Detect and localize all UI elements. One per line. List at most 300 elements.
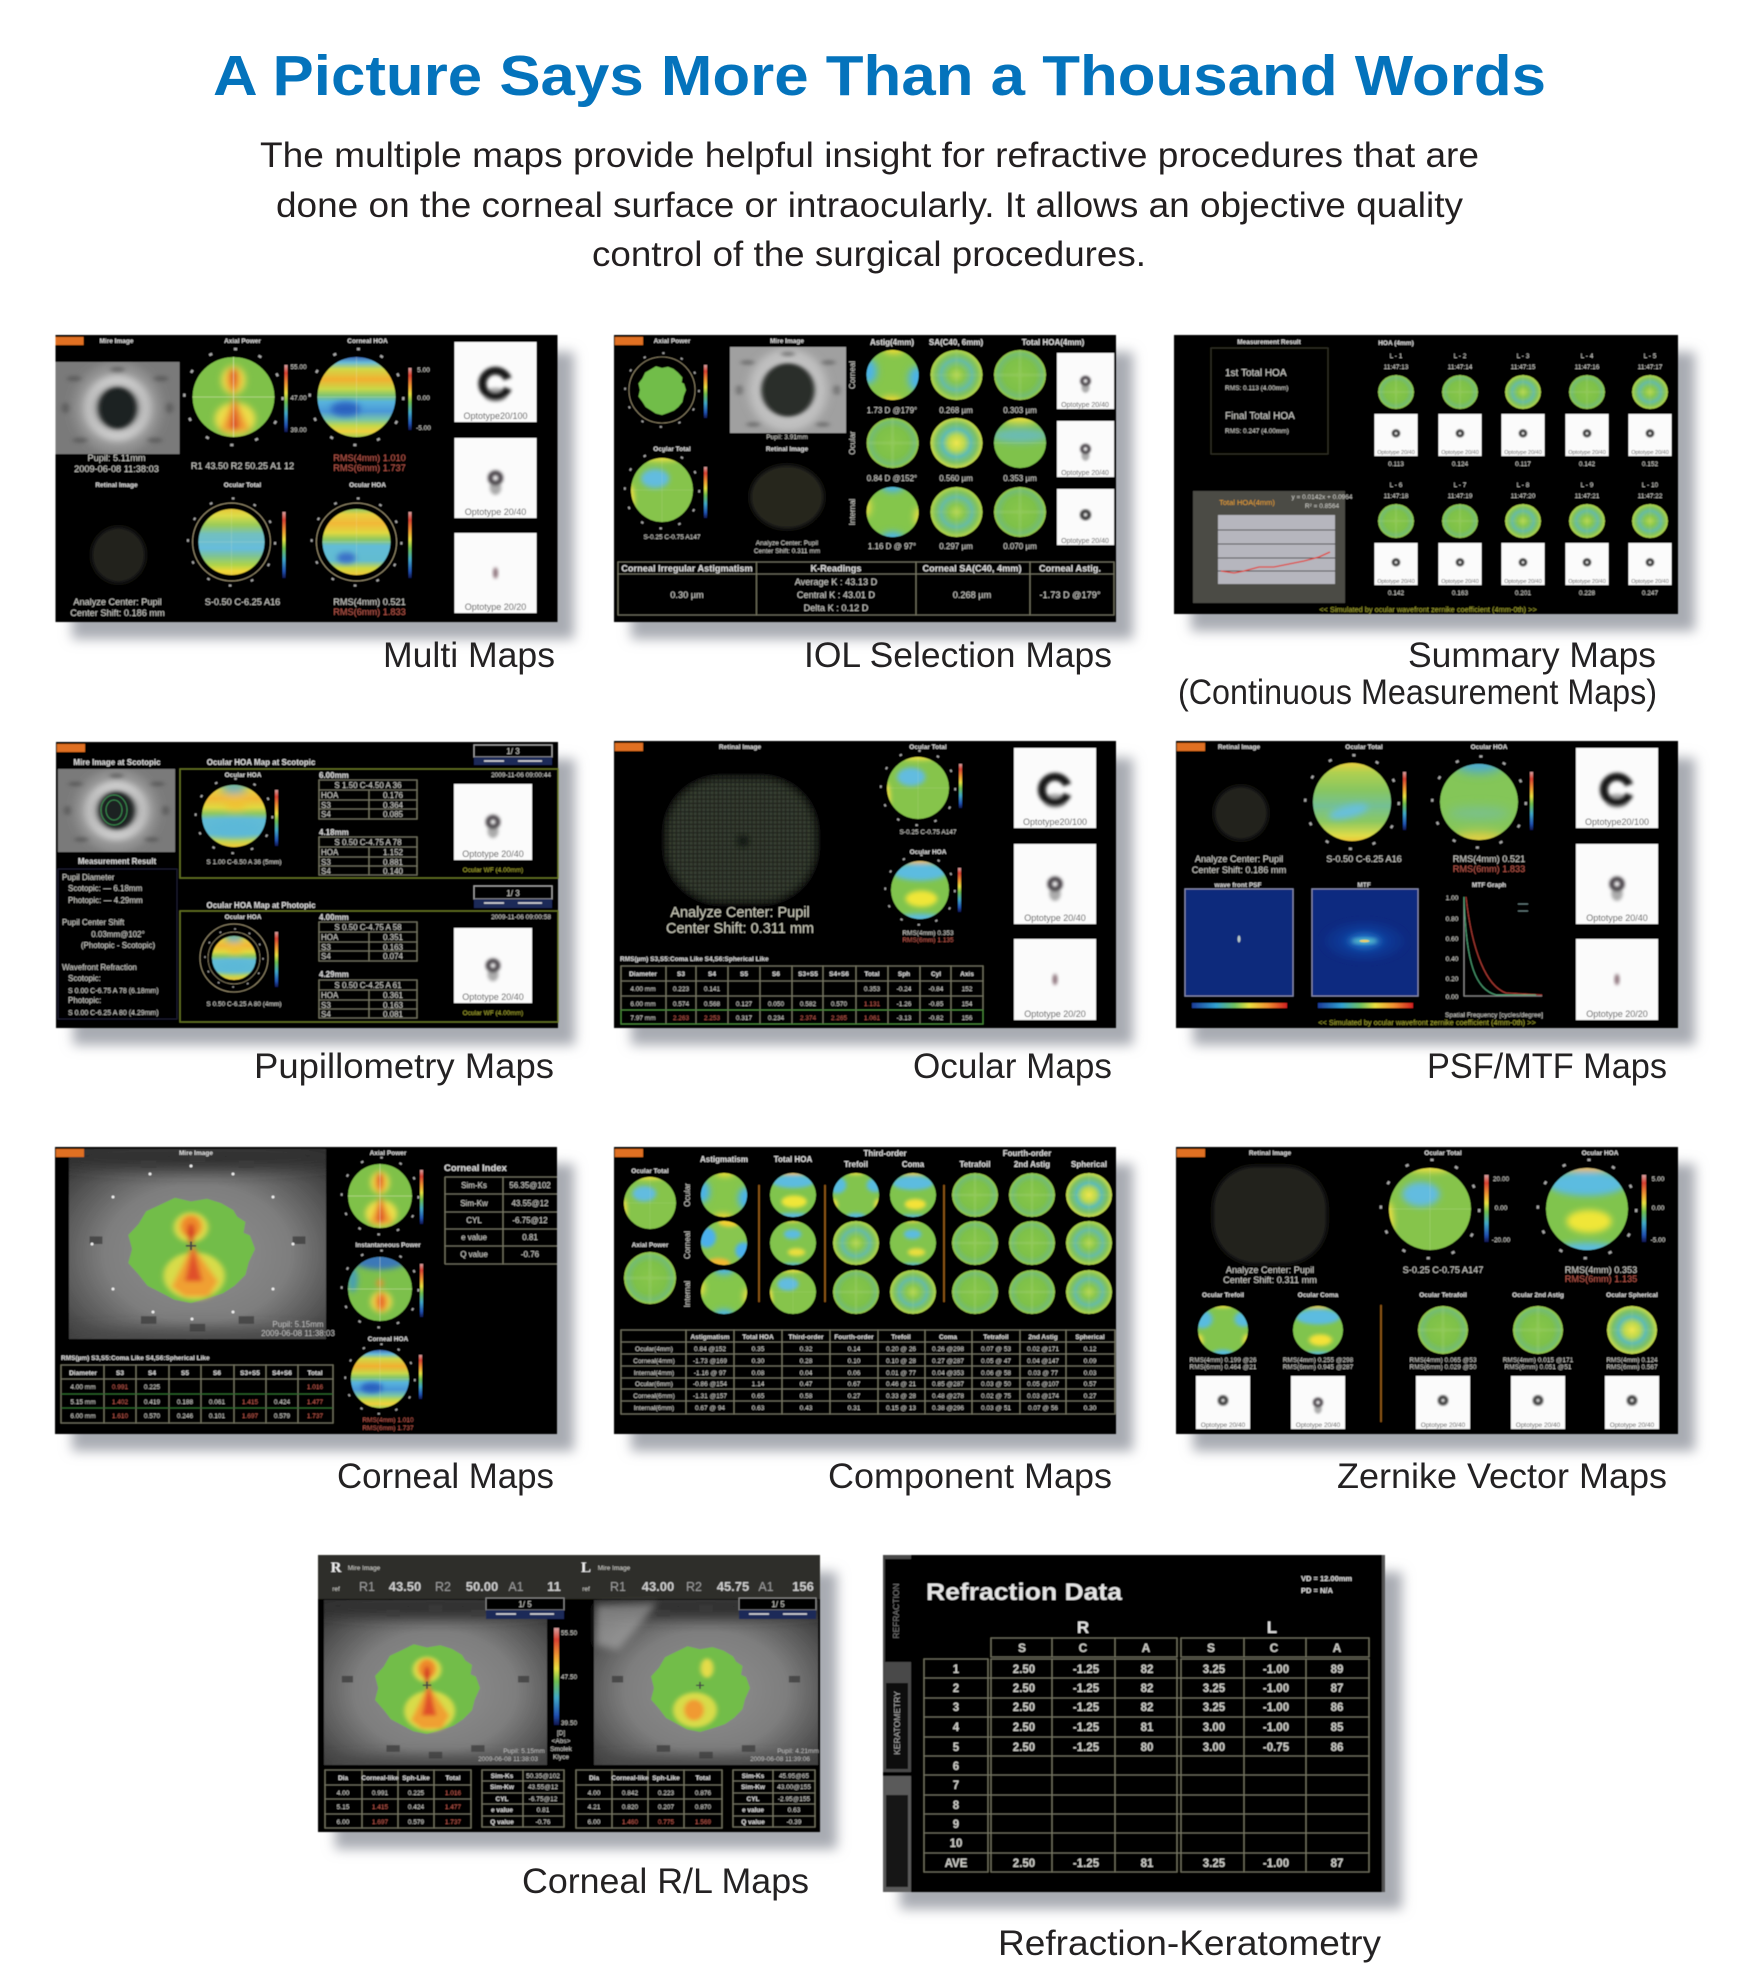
table: RMS values: 0.419: [144, 1399, 161, 1406]
table: refraction readings: 82: [1141, 1683, 1153, 1695]
table: corneal index: Sim-Kw: [460, 1199, 488, 1208]
screenshot: Zernike Vector Maps: [1176, 1147, 1678, 1434]
table: RMS values: 156: [962, 1015, 973, 1022]
screenshot: Summary Maps: 0.117: [1515, 461, 1531, 468]
tabs: REFRACTION: [891, 1583, 901, 1639]
table: component values: 0.07 @ 53: [981, 1346, 1011, 1353]
table: refraction readings: 6: [953, 1761, 959, 1773]
table: component values: 0.02 @ 75: [981, 1393, 1011, 1400]
table: left eye index: Sim-Ks: [742, 1773, 765, 1780]
screenshot: Summary Maps: 11:47:17: [1638, 364, 1663, 371]
table: component values: 0.31: [848, 1405, 861, 1412]
table: left eye index: -0.39: [787, 1819, 802, 1826]
screenshot: Multi Maps: Ocular Total: [224, 482, 261, 489]
screenshot: Multi Maps: RMS(6mm) 1.737: [333, 463, 406, 473]
screenshot: IOL Selection Maps: Astig(4mm): [870, 338, 914, 347]
table: left eye index: 43.00@155: [777, 1784, 811, 1791]
map: axial small: [625, 353, 699, 427]
screenshot: IOL Selection Maps: S-0.25 C-0.75 A147: [643, 534, 701, 541]
screenshot: Summary Maps: 11:47:21: [1575, 493, 1600, 500]
table: refraction readings: 7: [953, 1780, 959, 1792]
screenshot: Summary Maps: L - 10: [1642, 482, 1659, 489]
table: refraction readings: 4: [953, 1722, 960, 1734]
photopic section: [180, 886, 558, 1022]
screenshot: PSF/MTF Maps: wave front PSF: [1214, 882, 1261, 889]
panel: Zernike Vector Maps: [1176, 1147, 1695, 1496]
screenshot: Multi Maps: Mire Image: [100, 338, 134, 345]
table: component values: Ocular(4mm): [635, 1346, 673, 1353]
scotopic section: HOA: [321, 848, 339, 857]
photopic section: 0.351: [383, 933, 404, 942]
panel: Component Maps: [614, 1147, 1133, 1496]
table: RMS values: -1.26: [897, 1001, 912, 1008]
table: refraction readings: 8: [953, 1800, 960, 1812]
photopic section: S 0.50 C-6.25 A 80 (4mm): [206, 1001, 282, 1008]
table: component values: 0.08: [752, 1370, 765, 1377]
caption: Summary Maps: Summary Maps: [1408, 636, 1656, 675]
screenshot: Zernike Vector Maps: -5.00: [1651, 1237, 1666, 1244]
screenshot: Refraction-Keratometry: [883, 1555, 1385, 1892]
table: right eye index: [482, 1770, 564, 1827]
table: right eye RMS: 1.477: [445, 1804, 462, 1811]
screenshot: IOL Selection Maps: Axial Power: [654, 338, 691, 345]
screenshot: Zernike Vector Maps: RMS(4mm) 0.199 @26: [1190, 1357, 1257, 1364]
map: ocular total: [1305, 755, 1399, 849]
scotopic section: S3: [321, 858, 331, 867]
screenshot: Multi Maps: Axial Power: [224, 338, 261, 345]
table: corneal index: 0.81: [522, 1233, 538, 1242]
table: RMS values: S3: [116, 1370, 124, 1377]
table: refraction readings: -0.75: [1263, 1742, 1290, 1754]
table: component values: -0.86 @154: [693, 1381, 727, 1388]
table: left eye index: Q value: [741, 1819, 765, 1826]
table: component values: 0.46 @ 21: [886, 1381, 916, 1388]
screenshot: Zernike Vector Maps: Analyze Center: Pupil: [1226, 1265, 1314, 1275]
map: ocular total: [881, 750, 955, 825]
result box: [1211, 348, 1328, 454]
panel: Corneal Maps: [43, 1143, 574, 1496]
screenshot: Zernike Vector Maps: S-0.25 C-0.75 A147: [1403, 1265, 1483, 1275]
table: refraction readings: C: [1270, 1641, 1279, 1655]
screenshot: Summary Maps: HOA (4mm): [1378, 340, 1414, 347]
table: RMS values: S6: [213, 1370, 221, 1377]
table: component values: 0.10: [848, 1358, 861, 1365]
optotypes: Optotype 20/20: [1586, 1009, 1648, 1019]
chart: MTF graph: Spatial Frequency [cycles/degree]: [1445, 1012, 1543, 1019]
image: retinal: [92, 527, 146, 583]
table: left eye RMS: 4.00: [588, 1790, 601, 1797]
caption: Ocular Maps: Ocular Maps: [913, 1047, 1112, 1086]
optotypes 1-5: Optotype 20/40: [1631, 450, 1669, 456]
table: RMS values: 1.061: [864, 1015, 881, 1022]
table: component values: Trefoil: [891, 1334, 911, 1341]
table: RMS values: S3+S5: [798, 971, 818, 978]
table: RMS values: 0.582: [800, 1001, 817, 1008]
table: refraction readings: 87: [1331, 1858, 1343, 1870]
table: corneal index: e value: [461, 1233, 487, 1242]
table: left eye RMS: 0.876: [695, 1790, 712, 1797]
table: RMS values: S4: [148, 1370, 156, 1377]
screenshot: PSF/MTF Maps: MTF: [1357, 882, 1371, 889]
chart: MTF graph: 0.80: [1446, 916, 1459, 923]
panel: Ocular Maps: [614, 741, 1133, 1086]
table: corneal summary: Corneal Astig.: [1039, 564, 1101, 574]
chart: total HOA trend: R² = 0.8564: [1305, 503, 1339, 510]
image: spot grid: Center Shift: 0.311 mm: [666, 921, 814, 937]
table: corneal index: [444, 1163, 557, 1264]
table: component values: 0.04: [800, 1370, 813, 1377]
table: left eye index: [733, 1770, 815, 1827]
table: left eye index: -2.95@155: [778, 1796, 811, 1803]
image: corneal overlay on eye: 2009-06-08 11:38:03: [261, 1329, 335, 1338]
table: refraction readings: C: [1079, 1641, 1088, 1655]
photopic section: 4.29mm: [319, 970, 349, 979]
map: ocular HOA: [312, 498, 401, 586]
screenshot: Multi Maps: Retinal Image: [95, 482, 138, 489]
screenshot: IOL Selection Maps: 1.16 D @ 97°: [868, 542, 916, 551]
table: RMS values: 0.127: [736, 1001, 753, 1008]
optotypes: Optotype 20/40: [1586, 913, 1648, 923]
screenshot: Summary Maps: 11:47:14: [1448, 364, 1473, 371]
table: corneal index: -6.75@12: [512, 1216, 548, 1225]
screenshot: Component Maps: [614, 1147, 1116, 1434]
screenshot: PSF/MTF Maps: S-0.50 C-6.25 A16: [1326, 854, 1402, 864]
screenshot: Ocular Maps: RMS(4mm) 0.353: [902, 930, 954, 937]
table: RMS values: 4.00 mm: [70, 1384, 96, 1391]
table: refraction readings: 81: [1141, 1858, 1154, 1870]
screenshot: Zernike Vector Maps: 20.00: [1493, 1176, 1510, 1183]
screenshot: Ocular Maps: RMS(6mm) 1.135: [902, 937, 954, 944]
table: RMS values: 0.141: [704, 986, 721, 993]
table: component values: Fourth-order: [834, 1334, 874, 1341]
screenshot: PSF/MTF Maps: Ocular Total: [1345, 744, 1383, 751]
table: refraction readings: -1.00: [1263, 1664, 1289, 1676]
table: RMS values: 0.050: [768, 1001, 785, 1008]
optotypes 6-10: Optotype 20/40: [1441, 579, 1479, 585]
measurement result block: 0.03mm@102°: [91, 930, 145, 939]
table: RMS values: 0.991: [112, 1384, 129, 1391]
maps: measurements 6-10: [1378, 504, 1668, 538]
header strip: 50.00: [466, 1579, 498, 1594]
screenshot: PSF/MTF Maps: RMS(4mm) 0.521: [1453, 854, 1525, 864]
chart: total HOA trend: Total HOA(4mm): [1219, 498, 1275, 507]
table: refraction readings: -1.00: [1263, 1683, 1289, 1695]
screenshot: IOL Selection Maps: 0.560 µm: [939, 474, 973, 483]
panel: Multi Maps: [56, 335, 574, 675]
table: component values: 0.12: [1084, 1346, 1097, 1353]
screenshot: Component Maps: Total HOA: [774, 1155, 812, 1164]
screenshot: Zernike Vector Maps: Ocular 2nd Astig: [1512, 1292, 1564, 1299]
header strip: R2: [686, 1580, 702, 1594]
table: RMS values: 0.568: [704, 1001, 721, 1008]
vector maps: [1192, 1302, 1657, 1360]
screenshot: Summary Maps: 11:47:15: [1511, 364, 1536, 371]
table: right eye index: Sim-Ks: [491, 1773, 514, 1780]
table: refraction readings: 89: [1331, 1664, 1343, 1676]
chart: MTF graph: 0.00: [1446, 994, 1459, 1001]
measurement result block: [58, 869, 177, 1019]
screenshot: Refraction-Keratometry: L: [1267, 1618, 1277, 1637]
table: component values: 0.02 @171: [1027, 1346, 1059, 1353]
header strip: R2: [435, 1580, 451, 1594]
header strip: R: [331, 1560, 342, 1576]
table: refraction readings: 1: [953, 1664, 960, 1676]
table: component values: 0.03 @ 51: [981, 1405, 1011, 1412]
screenshot: Multi Maps: 55.00: [290, 364, 307, 371]
color scale: 47.50: [561, 1674, 578, 1681]
table: refraction readings: 3.25: [1203, 1664, 1226, 1676]
screenshot: Pupillometry Maps: Ocular HOA Map at Scotopic: [207, 758, 316, 767]
table: RMS values: 1.697: [242, 1413, 259, 1420]
optotypes 1-5: Optotype 20/40: [1504, 450, 1542, 456]
table: refraction readings: 3.25: [1203, 1858, 1226, 1870]
image: retinal: [1213, 1166, 1327, 1264]
screenshot: IOL Selection Maps: Retinal Image: [766, 446, 809, 453]
screenshot: Component Maps: Trefoil: [844, 1160, 868, 1169]
table: RMS values: 0.225: [144, 1384, 161, 1391]
caption: Zernike Vector Maps: Zernike Vector Maps: [1337, 1457, 1667, 1496]
screenshot: Summary Maps: Measurement Result: [1237, 339, 1302, 346]
screenshot: PSF/MTF Maps: MTF Graph: [1472, 882, 1506, 889]
table: component values: 0.67 @ 94: [695, 1405, 725, 1412]
panel: Summary Maps: [1174, 335, 1695, 712]
screenshot: Zernike Vector Maps: Ocular Tetrafoil: [1419, 1292, 1467, 1299]
table: RMS values: -0.85: [929, 1001, 944, 1008]
rotated row labels: [683, 1183, 692, 1307]
screenshot: PSF/MTF Maps: Analyze Center: Pupil: [1195, 854, 1283, 864]
color scale: [D]: [557, 1730, 565, 1737]
table: RMS values: 0.353: [864, 986, 881, 993]
screenshot: Summary Maps: 0.142: [1388, 590, 1405, 597]
table: component values: 0.10 @ 28: [886, 1358, 916, 1365]
screenshot: Summary Maps: 11:47:18: [1384, 493, 1409, 500]
screenshot: IOL Selection Maps: Ocular Total: [653, 446, 691, 453]
optotypes: Optotype 20/40: [1201, 1422, 1246, 1429]
screenshot: Zernike Vector Maps: Ocular Trefoil: [1202, 1292, 1244, 1299]
image: retinal: [1214, 786, 1268, 840]
screenshot: Zernike Vector Maps: Center Shift: 0.311 mm: [1223, 1275, 1317, 1285]
table: component values: 0.04 @147: [1027, 1358, 1059, 1365]
scotopic section: Ocular HOA: [225, 772, 262, 779]
table: RMS values: 2.253: [704, 1015, 721, 1022]
screenshot: Zernike Vector Maps: RMS(6mm) 0.567: [1606, 1364, 1658, 1371]
header strip: 43.50: [389, 1579, 421, 1594]
intro text: [260, 136, 1479, 274]
table: RMS values: Sph: [898, 971, 910, 978]
table: component values: Corneal(4mm): [633, 1358, 675, 1365]
table: component values: 0.84 @152: [694, 1346, 726, 1353]
screenshot: Corneal Maps: RMS(6mm) 1.737: [362, 1425, 414, 1432]
screenshot: Zernike Vector Maps: Ocular HOA: [1582, 1150, 1619, 1157]
screenshot: IOL Selection Maps: Pupil: 3.91mm: [766, 434, 808, 441]
table: refraction readings: -1.25: [1073, 1702, 1100, 1714]
table: left eye RMS: 6.00: [588, 1819, 601, 1826]
table: corneal summary: 0.268 µm: [953, 590, 992, 600]
table: RMS values: 7.97 mm: [630, 1015, 656, 1022]
screenshot: IOL Selection Maps: SA(C40, 6mm): [929, 338, 983, 347]
table: component values: Coma: [939, 1334, 957, 1341]
photopic section: S 0.50 C-4.25 A 61: [334, 981, 402, 990]
measurement result block: S 0.00 C-6.75 A 78 (6.18mm): [68, 988, 159, 995]
table: component values: 0.57: [1084, 1381, 1097, 1388]
scotopic section: Optotype 20/40: [462, 849, 524, 859]
table: RMS values: 5.15 mm: [70, 1399, 96, 1406]
optotypes: Optotype20/100: [463, 411, 528, 421]
table: right eye RMS: 5.15: [337, 1804, 350, 1811]
table: component values: Third-order: [788, 1334, 824, 1341]
map: ocular total: [1381, 1159, 1479, 1258]
screenshot: Ocular Maps: Ocular HOA: [910, 849, 947, 856]
table: refraction readings: -1.00: [1263, 1858, 1289, 1870]
screenshot: IOL Selection Maps: 0.070 µm: [1003, 542, 1037, 551]
optotypes 6-10: Optotype 20/40: [1377, 579, 1415, 585]
image: corneal overlay on eye: Pupil: 5.15mm: [272, 1320, 324, 1329]
color scale: Klyce: [553, 1754, 569, 1761]
measurement result block: Photopic: — 4.29mm: [68, 896, 143, 905]
table: left eye index: CYL: [746, 1796, 760, 1803]
screenshot: Summary Maps: 0.247: [1642, 590, 1659, 597]
color scale: [284, 365, 288, 432]
table: component values: 0.03 @174: [1027, 1393, 1059, 1400]
image: left eye map: [572, 1595, 840, 1773]
map: ocular total: [625, 451, 699, 528]
scotopic section: S4: [321, 867, 331, 876]
scotopic section: [180, 745, 558, 878]
table: corneal index: -0.76: [521, 1250, 540, 1259]
maps: reference: [620, 1171, 676, 1304]
table: refraction readings: 81: [1141, 1722, 1154, 1734]
table: corneal index: CYL: [466, 1216, 482, 1225]
rotated row labels: Internal: [683, 1280, 692, 1307]
table: corneal summary: K-Readings: [810, 564, 862, 574]
table: component values: 0.35: [752, 1346, 765, 1353]
screenshot: Component Maps: Coma: [902, 1160, 925, 1169]
screenshot: Pupillometry Maps: Ocular HOA Map at Photopic: [206, 901, 316, 910]
chart: MTF graph: 1.00: [1446, 895, 1459, 902]
screenshot: Component Maps: Ocular Total: [631, 1168, 669, 1175]
table: refraction readings: [924, 1638, 1369, 1872]
table: corneal summary: -1.73 D @179°: [1039, 590, 1101, 600]
table: component values: 0.65: [752, 1393, 765, 1400]
intro text: The multiple maps provide helpful insight for refractive procedures that are: [260, 136, 1479, 175]
table: refraction readings: A: [1142, 1641, 1151, 1655]
table: RMS values: S4+S6: [272, 1370, 292, 1377]
screenshot: Multi Maps: S-0.50 C-6.25 A16: [205, 597, 280, 607]
table: refraction readings: 3.25: [1203, 1683, 1226, 1695]
table: component values: Internal(6mm): [634, 1405, 674, 1412]
screenshot: Zernike Vector Maps: RMS(6mm) 0.051 @51: [1505, 1364, 1572, 1371]
table: component values: -1.31 @157: [693, 1393, 727, 1400]
table: RMS values: S4+S6: [829, 971, 849, 978]
scotopic section: 0.085: [383, 810, 404, 819]
caption: Corneal Maps: Corneal Maps: [337, 1457, 554, 1496]
screenshot: Multi Maps: Analyze Center: Pupil: [73, 597, 162, 607]
maps: measurements 1-5: [1378, 375, 1668, 409]
photopic section: HOA: [321, 933, 339, 942]
photopic section: S4: [321, 952, 331, 961]
table: refraction readings: 85: [1331, 1722, 1344, 1734]
screenshot: Summary Maps: 0.142: [1579, 461, 1596, 468]
screenshot: Multi Maps: R1 43.50 R2 50.25 A1 12: [191, 461, 294, 471]
table: RMS values: 6.00 mm: [630, 1001, 656, 1008]
screenshot: Multi Maps: 0.00: [417, 395, 430, 402]
scotopic section: S3: [321, 801, 331, 810]
table: RMS values: 2.374: [800, 1015, 817, 1022]
screenshot: Corneal Maps: Corneal HOA: [368, 1336, 409, 1343]
measurement result block: Scotopic: — 6.18mm: [68, 884, 143, 893]
screenshot: Zernike Vector Maps: RMS(4mm) 0.255 @298: [1283, 1357, 1354, 1364]
optotypes: Optotype 20/20: [1024, 1009, 1086, 1019]
table: left eye RMS: [576, 1770, 722, 1828]
table: refraction readings: 86: [1331, 1702, 1343, 1714]
table: RMS values: [620, 956, 983, 1024]
optotypes 1-5: Optotype 20/40: [1568, 450, 1606, 456]
optotypes: [454, 342, 536, 613]
table: corneal summary: Delta K : 0.12 D: [804, 603, 869, 613]
measurement result block: (Photopic - Scotopic): [81, 941, 155, 950]
heading: Refraction Data: Refraction Data: [926, 1579, 1123, 1606]
table: corneal summary: Corneal SA(C40, 4mm): [922, 564, 1022, 574]
table: right eye index: e value: [491, 1807, 513, 1814]
screenshot: PSF/MTF Maps: [1176, 741, 1678, 1028]
table: RMS values: 0.188: [177, 1399, 194, 1406]
screenshot: Summary Maps: L - 2: [1454, 353, 1467, 360]
screenshot: IOL Selection Maps: Mire Image: [770, 338, 804, 345]
table: right eye RMS: 1.415: [372, 1804, 389, 1811]
table: RMS values: 2.263: [673, 1015, 690, 1022]
screenshot: Zernike Vector Maps: 0.00: [1652, 1205, 1665, 1212]
table: component values: 0.04 @353: [932, 1370, 964, 1377]
measurement result block: Pupil Center Shift: [62, 918, 125, 927]
screenshot: IOL Selection Maps: 1.73 D @179°: [867, 406, 917, 415]
screenshot: Summary Maps: 11:47:19: [1448, 493, 1473, 500]
scotopic section: 0.176: [383, 791, 404, 800]
table: RMS values: -0.84: [929, 986, 944, 993]
scotopic section: S 0.50 C-4.75 A 78: [334, 838, 402, 847]
header strip: ref: [582, 1586, 590, 1593]
screenshot: PSF/MTF Maps: Retinal Image: [1218, 744, 1261, 751]
image: spot grid: Analyze Center: Pupil: [670, 905, 810, 921]
table: corneal index: Q value: [460, 1250, 488, 1259]
map: corneal HOA: [310, 349, 403, 445]
screenshot: Zernike Vector Maps: Retinal Image: [1249, 1150, 1292, 1157]
screenshot: Component Maps: Spherical: [1071, 1160, 1107, 1169]
table: RMS values: 1.131: [864, 1001, 881, 1008]
table: component values: 0.27 @287: [932, 1358, 964, 1365]
table: component values: 0.05 @107: [1027, 1381, 1059, 1388]
table: component values: Corneal(6mm): [633, 1393, 675, 1400]
screenshot: IOL Selection Maps: Center Shift: 0.311 mm: [754, 548, 820, 555]
table: refraction readings: 5: [953, 1742, 960, 1754]
table: right eye index: CYL: [496, 1796, 509, 1803]
image: mire: [730, 347, 846, 433]
component map grid: [694, 1168, 1112, 1321]
table: refraction readings: 2.50: [1013, 1664, 1035, 1676]
header strip: R1: [359, 1580, 375, 1594]
optotypes: [1576, 748, 1658, 1020]
table: refraction readings: -1.00: [1263, 1702, 1289, 1714]
table: refraction readings: 2.50: [1013, 1702, 1035, 1714]
optotypes: Optotype20/100: [1585, 817, 1649, 827]
table: right eye RMS: Corneal-like: [361, 1775, 399, 1782]
table: component values: 0.03 @ 77: [1028, 1370, 1058, 1377]
table: component values: 2nd Astig: [1028, 1334, 1058, 1341]
table: refraction readings: 3.25: [1203, 1702, 1226, 1714]
screenshot: Zernike Vector Maps: RMS(6mm) 0.464 @21: [1190, 1364, 1257, 1371]
optotypes 6-10: [1374, 543, 1672, 585]
page buttons: [486, 1598, 816, 1619]
table: right eye index: 0.81: [537, 1807, 550, 1814]
